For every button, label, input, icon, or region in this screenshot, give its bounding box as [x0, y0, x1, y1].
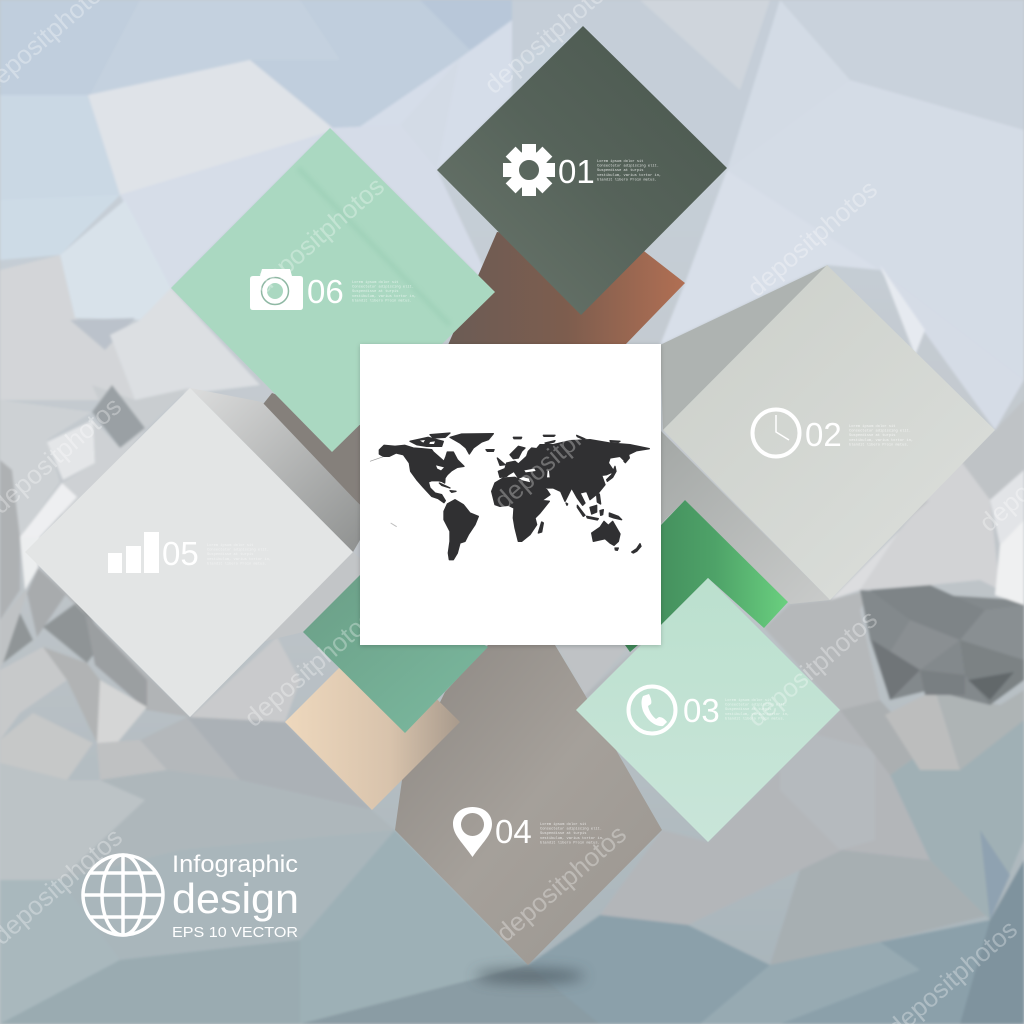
number 04: 04 [495, 813, 532, 850]
watermark text: depositphotos [488, 387, 630, 516]
icon: clock [752, 410, 800, 456]
shadow: tile 05 [190, 388, 360, 552]
icon: map pin [453, 807, 492, 857]
text block 02: Lorem ipsum dolor sit [849, 424, 895, 429]
text block 01: Suspendisse at turpis [597, 168, 643, 173]
text block 04: blandit libero Proin metus. [540, 840, 600, 845]
text block 03: vestibulum, varius tortor in, [725, 712, 789, 717]
text block 01 [597, 159, 661, 182]
icon: gear [503, 144, 555, 196]
text block 05: vestibulum, varius tortor in, [207, 557, 271, 562]
text block 06: Suspendisse at turpis [352, 289, 398, 294]
watermark text: depositphotos [238, 604, 380, 733]
text block 04 [540, 822, 604, 845]
shadow: tile 05 lower [262, 552, 362, 642]
panel: taupe back tile [260, 393, 360, 505]
panel: teal tile [303, 575, 488, 733]
eurasia africa oceania [490, 435, 649, 553]
panel: center white square [360, 344, 661, 645]
text block 05: Suspendisse at turpis [207, 552, 253, 557]
icon: globe [83, 855, 163, 935]
text block 04: Consectetur adipiscing elit. [540, 827, 602, 832]
panel: tile 04 location [395, 645, 662, 965]
text block 05: Lorem ipsum dolor sit [207, 543, 253, 548]
text block 05: Consectetur adipiscing elit. [207, 548, 269, 553]
text block 01: Lorem ipsum dolor sit [597, 159, 643, 164]
icon: phone [628, 686, 676, 734]
text block 06: Lorem ipsum dolor sit [352, 280, 398, 285]
text block 04: Lorem ipsum dolor sit [540, 822, 586, 827]
ground shadow [475, 969, 585, 983]
text block 03: Suspendisse at turpis [725, 707, 771, 712]
label: EPS 10 VECTOR: EPS 10 VECTOR [172, 925, 298, 941]
icon: bar chart [108, 532, 159, 573]
panel: brown back tile [448, 232, 685, 345]
number 01: 01 [558, 153, 595, 190]
text block 02: vestibulum, varius tortor in, [849, 438, 913, 443]
text block 06: vestibulum, varius tortor in, [352, 294, 416, 299]
text block 01: Consectetur adipiscing elit. [597, 164, 659, 169]
text block 02 [849, 424, 913, 447]
text block 03 [725, 698, 789, 721]
watermark text: depositphotos [248, 171, 390, 300]
text block 03: Lorem ipsum dolor sit [725, 698, 771, 703]
text block 02: Suspendisse at turpis [849, 433, 895, 438]
icon: camera [250, 269, 303, 310]
watermark text: depositphotos [490, 819, 632, 948]
number 02: 02 [805, 416, 842, 453]
label: design: design [172, 875, 299, 922]
text block 06 [352, 280, 416, 303]
text block 02: blandit libero Proin metus. [849, 442, 909, 447]
text block 05 [207, 543, 271, 566]
panel: tile 01 settings [437, 26, 727, 315]
panel: tile 05 chart [25, 388, 353, 717]
panel: tile 02 time [663, 265, 995, 600]
americas [370, 433, 494, 560]
number 03: 03 [683, 692, 720, 729]
panel: tile 06 photo [171, 128, 495, 452]
watermark text: depositphotos [741, 174, 883, 303]
text block 06: Consectetur adipiscing elit. [352, 285, 414, 290]
number 06: 06 [307, 273, 344, 310]
watermark text: depositphotos [741, 604, 883, 733]
label: Infographic: Infographic [172, 851, 298, 878]
text block 04: Suspendisse at turpis [540, 831, 586, 836]
text block 04: vestibulum, varius tortor in, [540, 836, 604, 841]
text block 01: vestibulum, varius tortor in, [597, 173, 661, 178]
text block 05: blandit libero Proin metus. [207, 561, 267, 566]
text block 03: blandit libero Proin metus. [725, 716, 785, 721]
text block 06: blandit libero Proin metus. [352, 298, 412, 303]
world map [370, 433, 649, 560]
panel: green back tile [625, 500, 788, 652]
number 05: 05 [162, 535, 199, 572]
shadow: tile 02 [660, 265, 828, 430]
text block 01: blandit libero Proin metus. [597, 177, 657, 182]
branding: infographic design [83, 851, 299, 941]
text block 02: Consectetur adipiscing elit. [849, 429, 911, 434]
text block 03: Consectetur adipiscing elit. [725, 703, 787, 708]
panel: tile 03 phone [576, 578, 840, 842]
panel: peach back tile [285, 635, 460, 810]
shadow: tile 02 lower [660, 430, 830, 604]
